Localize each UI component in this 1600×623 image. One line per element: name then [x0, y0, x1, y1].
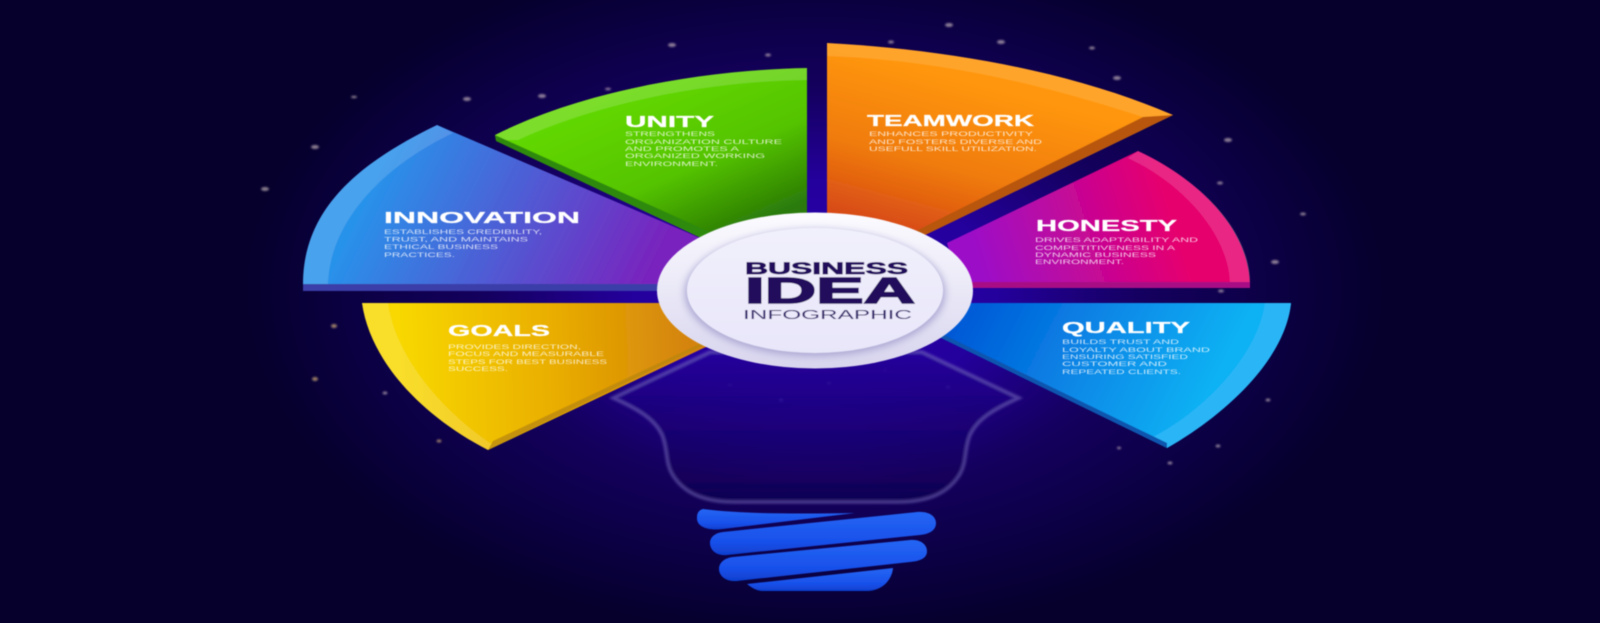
description	[384, 229, 542, 259]
heading: INNOVATION	[384, 210, 580, 227]
center badge: business idea infographic	[657, 212, 973, 368]
description: ORGANIZED WORKING	[625, 153, 765, 160]
base top thread	[697, 509, 855, 530]
star field	[261, 23, 1306, 464]
panel: quality	[925, 303, 1291, 448]
segment shape	[947, 151, 1250, 287]
description	[1062, 339, 1210, 376]
heading: UNITY	[625, 114, 715, 131]
text: goals	[448, 323, 608, 373]
description	[869, 131, 1042, 153]
text: quality	[1062, 320, 1210, 376]
panel: unity	[495, 68, 807, 245]
segment base strip	[303, 284, 693, 291]
description: PRACTICES.	[384, 252, 455, 259]
description: ORGANIZATION CULTURE	[625, 139, 783, 146]
description: COMPETITIVENESS IN A	[1035, 245, 1176, 252]
panel: innovation	[303, 125, 705, 291]
segment edge	[935, 333, 1167, 448]
description: PROVIDES DIRECTION,	[448, 344, 581, 351]
panel: goals	[362, 303, 710, 450]
description: ETHICAL BUSINESS	[384, 244, 499, 251]
segment base strip	[960, 282, 1250, 288]
base thread 1	[710, 512, 936, 555]
icon: bulb screw base	[697, 509, 936, 591]
title line 1: BUSINESS	[745, 259, 908, 278]
description: BUILDS TRUST AND	[1062, 339, 1179, 346]
description: CUSTOMER AND	[1062, 361, 1167, 368]
base bottom thread	[747, 568, 893, 591]
description: TRUST, AND MAINTAINS	[384, 236, 529, 244]
heading: GOALS	[448, 323, 551, 340]
segment shape	[303, 125, 705, 291]
text: innovation	[384, 210, 580, 259]
description: FOCUS AND MEASURABLE	[448, 351, 605, 358]
text: teamwork	[867, 113, 1042, 153]
description: ENVIRONMENT.	[625, 161, 718, 168]
description	[1035, 237, 1198, 266]
segment rim highlight	[1128, 151, 1250, 282]
base thread 2	[719, 540, 927, 581]
segment shape	[495, 68, 807, 245]
description: DRIVES ADAPTABILITY AND	[1035, 237, 1198, 244]
heading: TEAMWORK	[867, 113, 1035, 130]
segment rim highlight	[495, 68, 807, 140]
text: honesty	[1035, 218, 1198, 266]
segment shape	[925, 303, 1291, 448]
panel: teamwork	[827, 43, 1173, 240]
description: ESTABLISHES CREDIBILITY,	[384, 229, 542, 236]
description: STEPS FOR BEST BUSINESS	[448, 359, 608, 366]
segment rim highlight	[362, 303, 493, 450]
description	[448, 344, 608, 373]
text: unity	[625, 114, 783, 168]
segment rim highlight	[303, 125, 453, 284]
segment edge	[914, 115, 1173, 236]
title line 2: IDEA	[745, 270, 915, 311]
description: DYNAMIC BUSINESS	[1035, 252, 1157, 259]
segment shape	[827, 43, 1173, 240]
description: ENVIRONMENT.	[1035, 259, 1124, 266]
heading: HONESTY	[1036, 218, 1178, 235]
description: REPEATED CLIENTS.	[1062, 369, 1181, 376]
inner disc shadow	[685, 230, 945, 356]
description: ENSURING SATISFIED	[1062, 354, 1188, 361]
description: USEFULL SKILL UTILIZATION.	[869, 146, 1037, 153]
description: STRENGTHENS	[625, 131, 716, 138]
panel: honesty	[947, 151, 1250, 288]
segment shape	[362, 303, 710, 450]
segment edge	[488, 340, 708, 450]
description: AND FOSTERS DIVERSE AND	[869, 139, 1042, 146]
icon: light bulb glass outline	[613, 352, 1019, 502]
description: ENHANCES PRODUCTIVITY	[869, 131, 1034, 138]
description: AND PROMOTES A	[625, 146, 740, 153]
description: SUCCESS.	[448, 366, 508, 373]
heading: QUALITY	[1062, 320, 1191, 337]
segment rim highlight	[1153, 303, 1291, 448]
segment edge	[495, 135, 712, 239]
segment rim highlight	[827, 43, 1173, 117]
description: LOYALTY ABOUT BRAND	[1062, 347, 1210, 354]
title line 3: INFOGRAPHIC	[743, 307, 912, 322]
inner disc	[687, 228, 943, 353]
outer rim	[657, 212, 973, 368]
description	[625, 131, 783, 168]
